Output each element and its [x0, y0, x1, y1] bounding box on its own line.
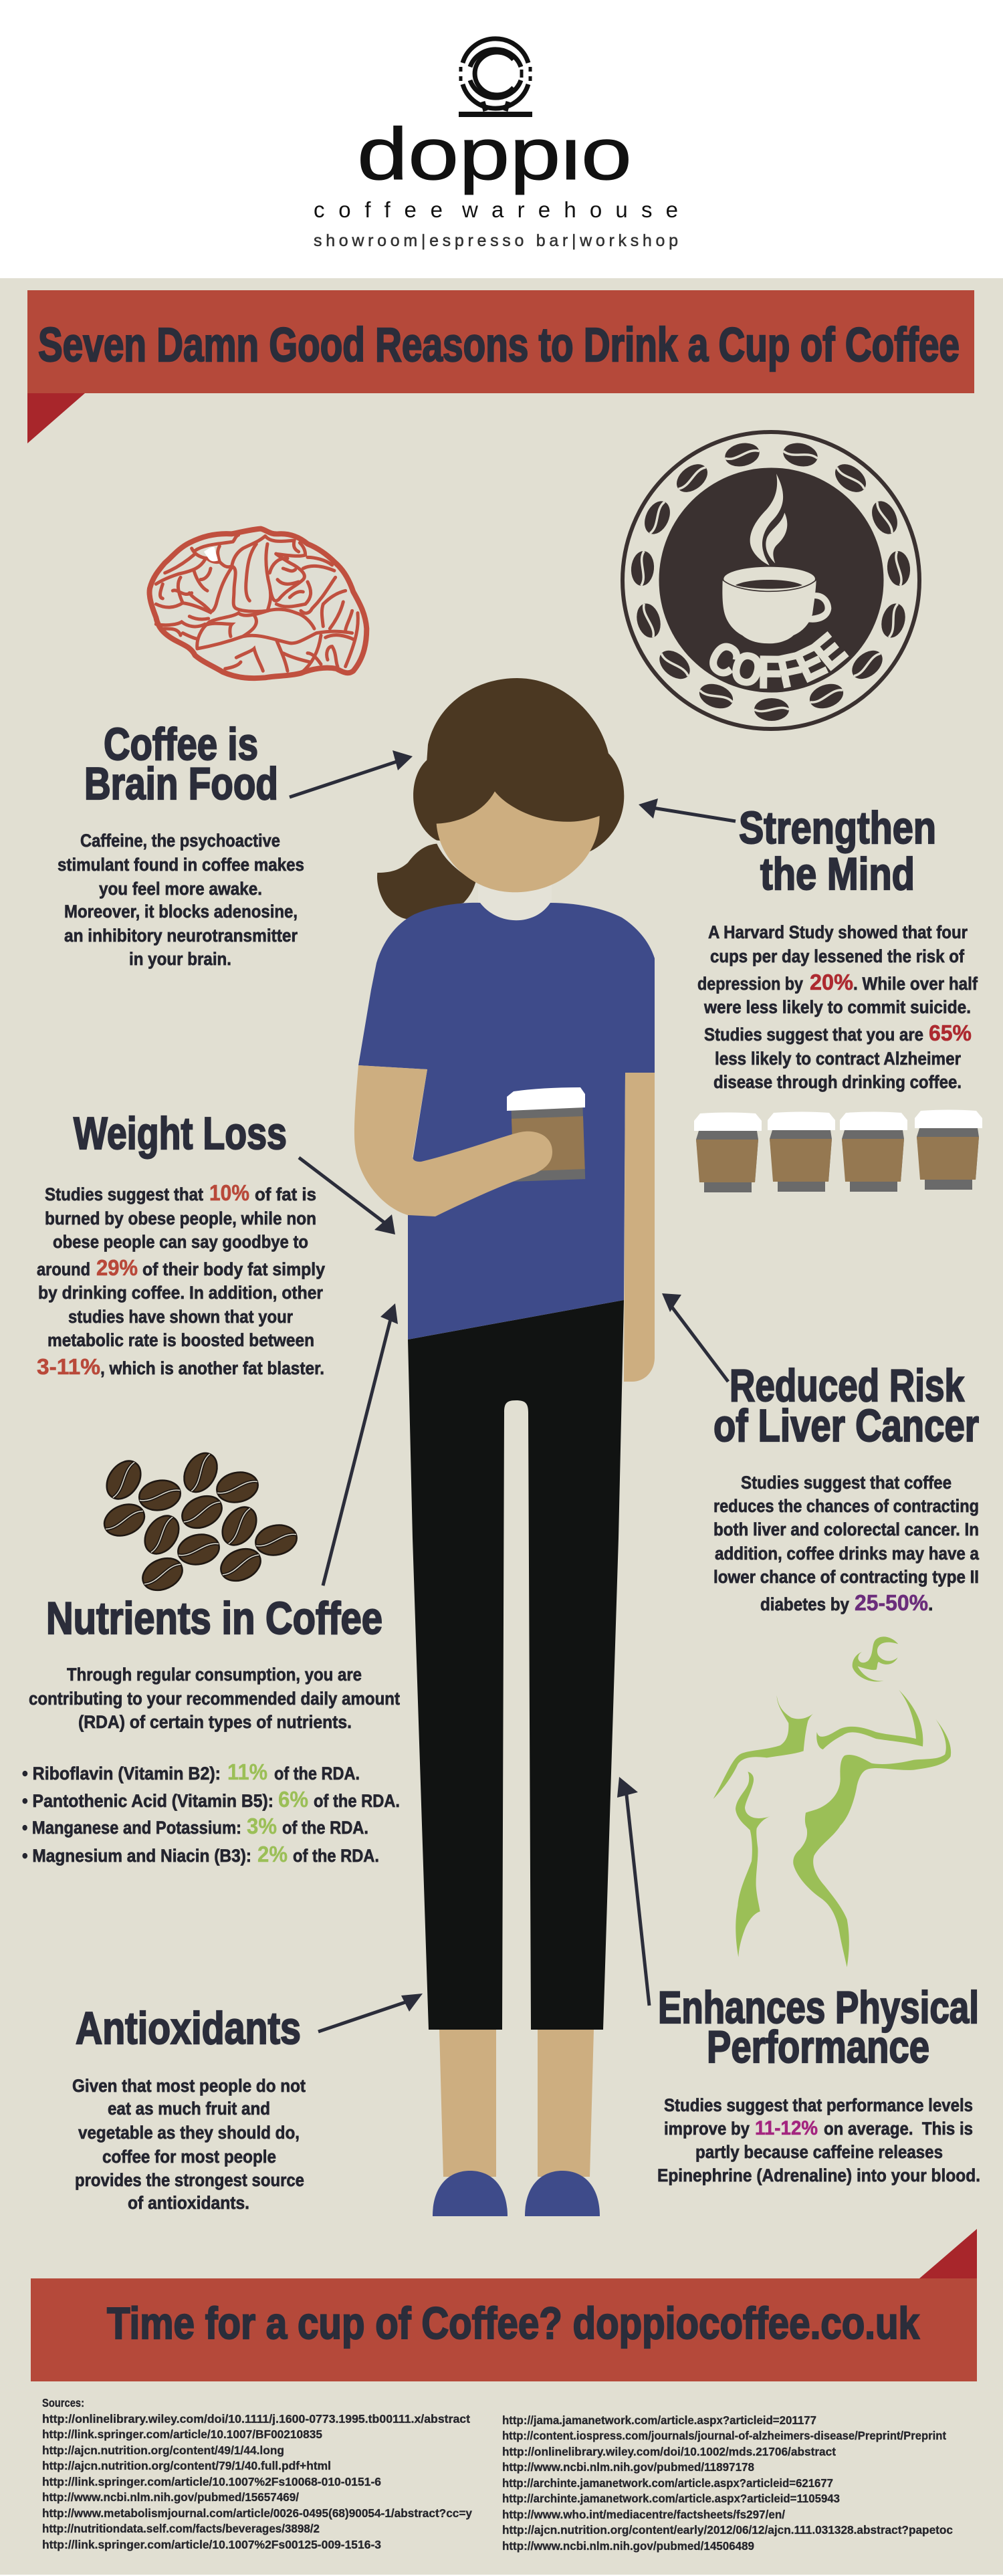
- person figure: [354, 678, 655, 2216]
- header logo: [314, 39, 678, 250]
- section: nutrients in coffee: [22, 1593, 400, 1866]
- body text: 11-12%: [755, 2117, 818, 2139]
- body text: of antioxidants.: [128, 2193, 249, 2213]
- body text: depression by: [697, 974, 803, 994]
- logo subtitle: coffee: [314, 197, 443, 222]
- body text: 3-11%: [37, 1354, 100, 1379]
- body text: [72, 2076, 306, 2213]
- sources: right column: http://www.who.int/mediacentre/factsheets/fs297/en/: [502, 2508, 785, 2521]
- body text: stimulant found in coffee makes: [58, 855, 304, 875]
- body text: Studies suggest that performance levels: [664, 2095, 973, 2115]
- body text: 25-50%: [855, 1590, 928, 1615]
- shirt: [358, 903, 655, 1339]
- nutrient list: • Riboflavin (Vitamin B2):: [22, 1763, 221, 1784]
- footer banner: [31, 2229, 977, 2381]
- body text: around: [37, 1259, 90, 1279]
- body text: contributing to your recommended daily amount: [29, 1689, 400, 1709]
- body text: diabetes by: [760, 1594, 849, 1614]
- body text: in your brain.: [129, 949, 231, 969]
- legs: [439, 2030, 594, 2177]
- body text: Studies suggest that coffee: [741, 1473, 952, 1493]
- nutrient list: • Pantothenic Acid (Vitamin B5):: [22, 1791, 273, 1811]
- logo subtitle: [314, 197, 678, 222]
- icon: brain: [150, 529, 366, 678]
- nutrient list: [22, 1759, 400, 1866]
- heading: Brain Food: [84, 758, 278, 809]
- body text: on average. This is: [824, 2119, 973, 2139]
- nutrient list: of the RDA.: [314, 1791, 400, 1811]
- body text: .: [928, 1594, 933, 1614]
- body text: Given that most people do not: [72, 2076, 306, 2096]
- body text: [713, 1473, 980, 1615]
- logo subtitle: warehouse: [461, 197, 678, 222]
- body text: provides the strongest source: [75, 2170, 304, 2190]
- sources: left column: Sources:: [42, 2396, 84, 2409]
- sources: left column: http://link.springer.com/article/10.1007%2Fs00125-009-1516-3: [42, 2538, 381, 2551]
- section: antioxidants: [72, 2003, 306, 2213]
- sources: left column: http://www.ncbi.nlm.nih.gov/pubmed/15657469/: [42, 2490, 299, 2504]
- nutrient list: 2%: [257, 1842, 288, 1866]
- icon: coffee beans: [100, 1447, 300, 1596]
- section: coffee is brain food: [58, 719, 304, 969]
- sources: left column: http://nutritiondata.self.com/facts/beverages/3898/2: [42, 2522, 320, 2535]
- heading: [739, 802, 936, 899]
- body text: Moreover, it blocks adenosine,: [64, 901, 298, 922]
- body text: , which is another fat blaster.: [100, 1358, 324, 1378]
- body text: partly because caffeine releases: [695, 2142, 943, 2162]
- section: reduced risk of liver cancer: [713, 1360, 980, 1615]
- title banner: [27, 290, 974, 443]
- held coffee cup: [507, 1087, 585, 1182]
- body text: eat as much fruit and: [108, 2099, 270, 2119]
- body text: Studies suggest that you are: [704, 1025, 923, 1045]
- body text: vegetable as they should do,: [78, 2123, 300, 2143]
- heading: Strengthen: [739, 802, 936, 853]
- icon: four takeaway cups: [694, 1110, 982, 1192]
- sources: right column: http://content.iospress.com/journals/journal-of-alzheimers-disease/Preprint/Preprint: [502, 2429, 946, 2442]
- icon: coffee badge: [621, 430, 921, 731]
- body text: of their body fat simply: [142, 1259, 325, 1279]
- body text: improve by: [664, 2119, 750, 2139]
- body text: by drinking coffee. In addition, other: [38, 1283, 323, 1303]
- body text: Studies suggest that: [45, 1184, 203, 1204]
- body text: of fat is: [255, 1184, 316, 1204]
- nutrient list: • Magnesium and Niacin (B3):: [22, 1846, 251, 1866]
- sources: left column: http://ajcn.nutrition.org/content/49/1/44.long: [42, 2444, 284, 2457]
- body text: 29%: [96, 1255, 138, 1280]
- sources: left column: http://onlinelibrary.wiley.com/doi/10.1111/j.1600-0773.1995.tb00111.x/abstract: [42, 2412, 470, 2426]
- arrow: nutrients: [323, 1303, 398, 1586]
- hair: [413, 678, 624, 853]
- body text: obese people can say goodbye to: [53, 1232, 308, 1252]
- body text: addition, coffee drinks may have a: [715, 1543, 980, 1564]
- sources: left column: http://link.springer.com/article/10.1007/BF00210835: [42, 2428, 322, 2441]
- sources: right column: http://archinte.jamanetwork.com/article.aspx?articleid=621677: [502, 2476, 833, 2490]
- nutrient list: of the RDA.: [282, 1818, 368, 1838]
- body text: Through regular consumption, you are: [67, 1665, 362, 1685]
- body text: [697, 922, 978, 1092]
- heading: [713, 1360, 979, 1451]
- body text: less likely to contract Alzheimer: [715, 1049, 961, 1069]
- body text: studies have shown that your: [68, 1307, 293, 1327]
- sources: right column: http://www.ncbi.nlm.nih.gov/pubmed/14506489: [502, 2539, 754, 2553]
- nutrient list: 3%: [247, 1814, 277, 1838]
- arrow: brain food: [290, 750, 413, 797]
- heading: Performance: [707, 2022, 929, 2072]
- body text: 20%: [810, 970, 853, 994]
- sources: left column: http://www.metabolismjournal.com/article/0026-0495(68)90054-1/abstract?cc=y: [42, 2506, 472, 2520]
- nutrient list: of the RDA.: [293, 1846, 379, 1866]
- heading: Antioxidants: [76, 2003, 301, 2054]
- body text: metabolic rate is boosted between: [47, 1330, 314, 1350]
- arrow: performance: [617, 1777, 649, 2006]
- body text: cups per day lessened the risk of: [710, 946, 965, 966]
- arrow: strengthen the mind: [639, 798, 736, 821]
- body text: (RDA) of certain types of nutrients.: [78, 1712, 352, 1732]
- body text: Epinephrine (Adrenaline) into your blood.: [657, 2165, 980, 2185]
- section: enhances physical performance: [657, 1982, 980, 2185]
- bent arm: [354, 1065, 552, 1216]
- heading: Nutrients in Coffee: [46, 1593, 382, 1644]
- body text: A Harvard Study showed that four: [708, 922, 968, 942]
- sources: left column: [42, 2396, 472, 2551]
- body text: [657, 2095, 980, 2185]
- body text: [29, 1665, 400, 1732]
- icon: coffee badge: COFFEE: [709, 631, 849, 689]
- sources: right column: [502, 2413, 953, 2553]
- heading: [658, 1982, 979, 2072]
- sources: right column: http://archinte.jamanetwork.com/article.aspx?articleid=1105943: [502, 2492, 840, 2505]
- icon: doppio cup logo: [459, 39, 532, 117]
- icon: green athletic figure: [713, 1636, 951, 1967]
- body text: 65%: [929, 1021, 972, 1045]
- heading: the Mind: [760, 849, 915, 899]
- body text: both liver and colorectal cancer. In: [713, 1519, 979, 1539]
- body text: coffee for most people: [102, 2147, 276, 2167]
- nutrient list: of the RDA.: [274, 1763, 360, 1784]
- heading: [84, 719, 278, 809]
- body text: Caffeine, the psychoactive: [80, 831, 280, 851]
- sources: right column: http://onlinelibrary.wiley.com/doi/10.1002/mds.21706/abstract: [502, 2445, 836, 2458]
- trousers: [408, 1300, 624, 2030]
- sources: right column: http://www.ncbi.nlm.nih.gov/pubmed/11897178: [502, 2460, 754, 2474]
- body text: burned by obese people, while non: [45, 1208, 316, 1228]
- body text: lower chance of contracting type II: [713, 1567, 979, 1587]
- sources: left column: http://ajcn.nutrition.org/content/79/1/40.full.pdf+html: [42, 2459, 331, 2472]
- body text: [58, 831, 304, 969]
- sources: right column: http://jama.jamanetwork.com/article.aspx?articleid=201177: [502, 2413, 816, 2427]
- body text: were less likely to commit suicide.: [703, 997, 971, 1017]
- ponytail: [377, 844, 476, 920]
- section: weight loss: [37, 1108, 325, 1379]
- section: strengthen the mind: [697, 802, 978, 1092]
- logo tagline: showroom|espresso bar|workshop: [314, 231, 678, 250]
- body text: you feel more awake.: [99, 879, 262, 899]
- neck: [478, 883, 552, 926]
- body text: an inhibitory neurotransmitter: [64, 926, 298, 946]
- arrow: antioxidants: [318, 1994, 423, 2032]
- nutrient list: • Manganese and Potassium:: [22, 1818, 241, 1838]
- straight arm: [624, 1073, 655, 1382]
- body text: 10%: [209, 1180, 249, 1205]
- nutrient list: 11%: [227, 1759, 267, 1784]
- arrow: liver: [662, 1293, 728, 1382]
- sources: left column: http://link.springer.com/article/10.1007%2Fs10068-010-0151-6: [42, 2475, 381, 2488]
- nutrient list: 6%: [278, 1787, 308, 1812]
- face: [437, 791, 600, 892]
- logo wordmark: doppio: [357, 113, 632, 195]
- body text: disease through drinking coffee.: [713, 1072, 962, 1092]
- body text: . While over half: [853, 974, 978, 994]
- sources: right column: http://ajcn.nutrition.org/content/early/2012/06/12/ajcn.111.031328.abstract?papetoc: [502, 2523, 953, 2537]
- arrow: weight loss: [299, 1158, 395, 1235]
- shoes: [433, 2171, 600, 2216]
- heading: Coffee is: [104, 719, 258, 770]
- body text: [37, 1180, 325, 1379]
- heading: Weight Loss: [74, 1108, 287, 1159]
